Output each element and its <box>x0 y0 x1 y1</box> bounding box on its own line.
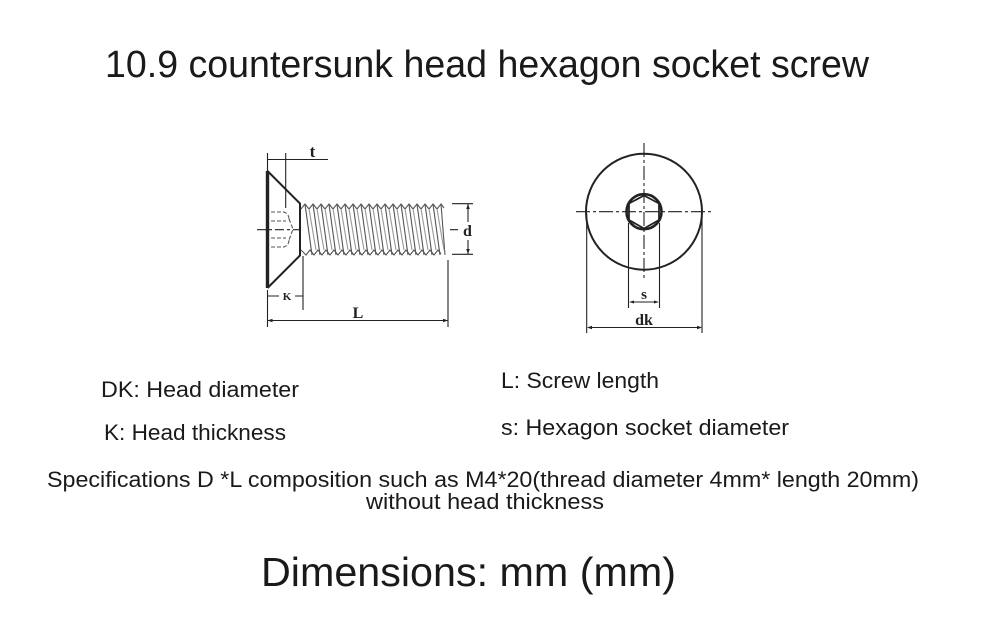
text: dimensions unit: Dimensions: mm (mm) <box>261 549 676 595</box>
hexagon socket hidden lines <box>271 212 293 247</box>
dimension lines <box>268 153 473 327</box>
centre line <box>257 229 458 231</box>
centre lines <box>576 143 712 278</box>
screw thread <box>301 204 445 255</box>
socket circle <box>626 194 662 229</box>
text: specification note: Specifications D *L composition such as M4*20(thread diameter 4mm* length 20mm) <box>47 467 919 492</box>
label: dk: dk <box>635 312 653 329</box>
label: t: t <box>310 142 316 161</box>
text: K legend: K: Head thickness <box>104 420 286 445</box>
hexagon <box>629 196 659 228</box>
head circle <box>586 154 702 270</box>
title: 10.9 countersunk head hexagon socket screw <box>105 44 870 86</box>
screw head <box>268 171 300 288</box>
label: L: L <box>353 305 363 322</box>
text: DK legend: DK: Head diameter <box>101 377 299 402</box>
text: specification note <box>47 467 919 514</box>
text: s legend: s: Hexagon socket diameter <box>501 415 789 440</box>
diagram: screw side view <box>257 153 473 327</box>
diagram: screw top view <box>576 143 712 333</box>
dimension lines <box>587 214 702 333</box>
text: L legend: L: Screw length <box>501 368 659 393</box>
dimension arrowheads <box>587 300 702 329</box>
label: s: s <box>641 287 647 303</box>
dimension arrowheads <box>268 204 470 322</box>
label: K: K <box>283 291 292 303</box>
text: specification note: without head thickness <box>365 489 604 514</box>
label: d: d <box>463 223 472 240</box>
